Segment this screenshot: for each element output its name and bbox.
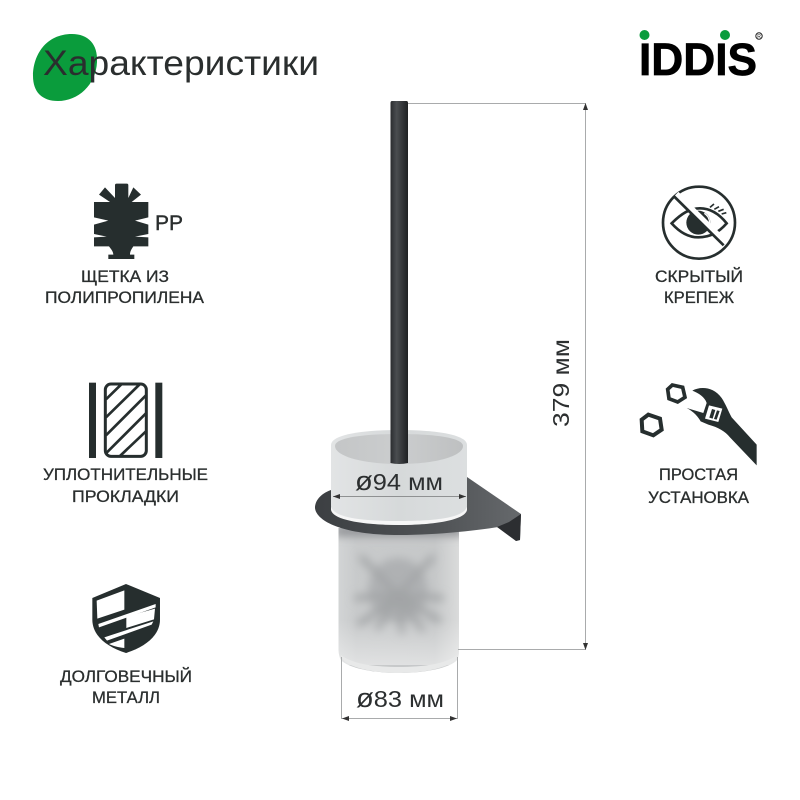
feature: gaskets (43, 383, 208, 506)
metal caption: ДОЛГОВЕЧНЫЙ (60, 667, 192, 686)
feature: polypropylene brush (45, 184, 205, 307)
fastening caption: СКРЫТЫЙ (655, 267, 743, 286)
logo: IDDIS: R (757, 34, 761, 40)
title: Характеристики with green blob (33, 34, 319, 101)
dimension: diameter 83 mm: ø83 мм (356, 683, 444, 713)
upper glass (331, 430, 467, 525)
brush head seen through frosted glass (335, 526, 463, 632)
glass base rim (341, 655, 457, 673)
plate bracket (497, 514, 521, 541)
gasket caption: УПЛОТНИТЕЛЬНЫЕ (43, 465, 208, 484)
feature: easy installation (642, 385, 757, 507)
icon: wrench and nuts (642, 385, 757, 465)
wall plate (315, 477, 521, 541)
icon: shield (92, 584, 160, 653)
feature: easy installation: УСТАНОВКА (648, 488, 750, 507)
title: Характеристики with green blob: Характеристики (43, 44, 319, 83)
dimension: diameter 83 mm (342, 657, 458, 721)
installation caption: ПРОСТАЯ (659, 465, 738, 484)
glass lower rim highlight (331, 506, 467, 525)
frosted fade toward base (338, 632, 459, 665)
logo: IDDIS: IDDIS (639, 34, 757, 85)
product: toilet brush holder (315, 101, 521, 673)
dimension: height 379 mm: 379 мм (548, 339, 574, 427)
brush rod (390, 101, 408, 464)
upper glass interior (335, 434, 463, 464)
dimension: diameter 94 mm (333, 466, 466, 499)
brush caption: ЩЕТКА ИЗ (81, 267, 169, 286)
feature: gaskets: ПРОКЛАДКИ (72, 487, 179, 506)
icon: brush head (94, 184, 148, 259)
feature: polypropylene brush: ПОЛИПРОПИЛЕНА (45, 288, 205, 307)
icon: crossed-out eye (663, 187, 735, 259)
feature: durable metal: МЕТАЛЛ (92, 688, 160, 707)
feature: hidden fastening (655, 187, 743, 307)
feature: durable metal (60, 584, 192, 707)
icon: gasket between two walls (89, 383, 162, 458)
lower glass (338, 528, 459, 673)
dimension: height 379 mm (408, 103, 588, 650)
feature: hidden fastening: КРЕПЕЖ (664, 288, 734, 307)
dimension: diameter 94 mm: ø94 мм (355, 466, 443, 496)
PP label: PP (155, 212, 183, 235)
